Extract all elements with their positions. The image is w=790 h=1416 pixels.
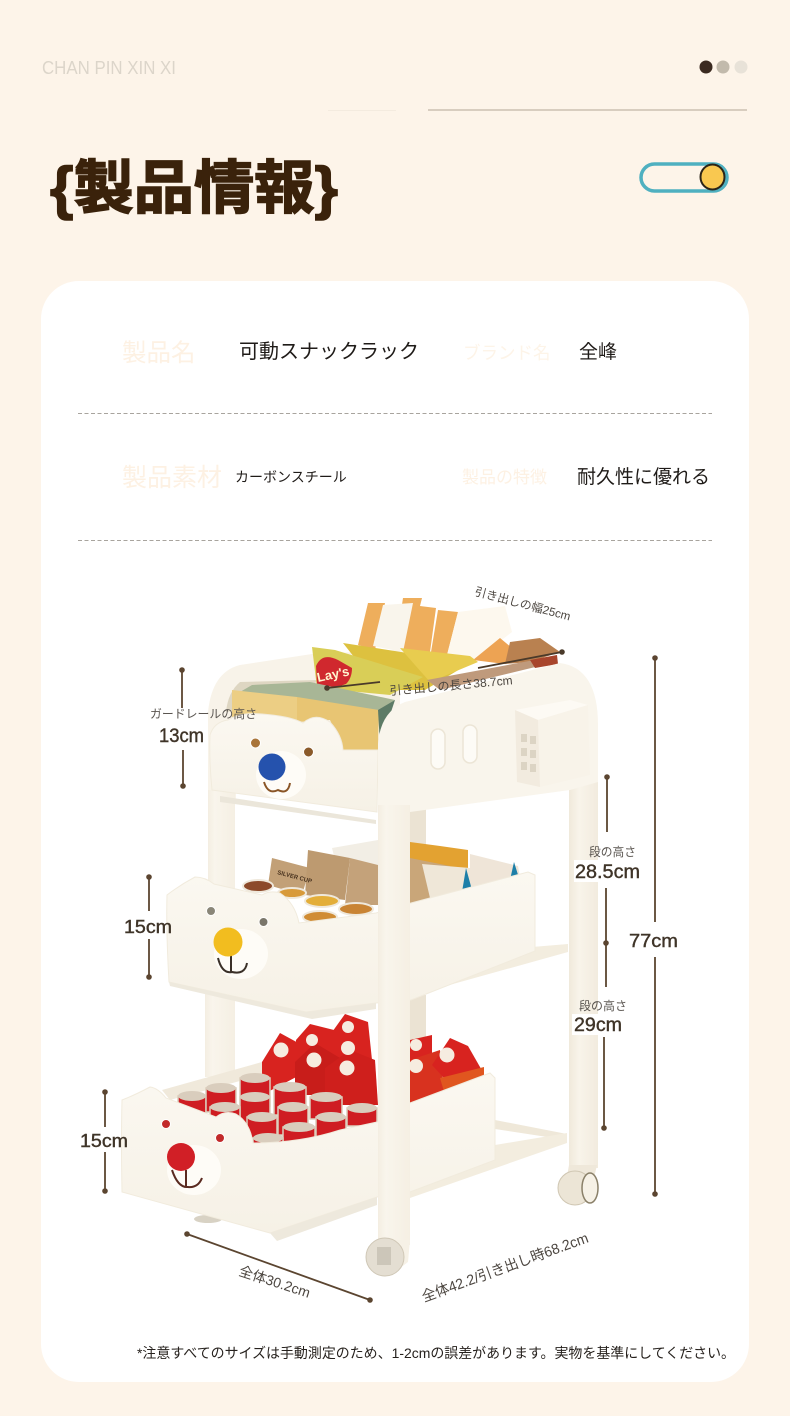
label: brand name: ブランド名	[463, 343, 550, 363]
title: {製品情報}	[50, 156, 338, 221]
rear frame	[205, 650, 426, 1077]
middle drawer with bear face	[167, 872, 535, 1019]
middle drawer contents	[243, 840, 520, 923]
dimension: upper tier height	[574, 774, 642, 987]
front left leg	[378, 805, 410, 1245]
bear mouth	[264, 782, 290, 791]
bear eyes	[206, 906, 268, 926]
top drawer contents: Lay's	[316, 663, 351, 685]
dimension: depth: 全体30.2cm	[237, 1263, 312, 1301]
bear mouth	[218, 952, 247, 973]
paper cups	[243, 880, 373, 923]
dimension: depth	[184, 1231, 373, 1303]
front top panel with pencil holder	[378, 663, 598, 814]
dimension: drawer width: 引き出しの幅25cm	[473, 584, 572, 623]
dimension: upper tier height: 28.5cm	[575, 862, 640, 883]
icon: rear caster wheel	[558, 1165, 598, 1205]
value: material: カーボンスチール	[235, 469, 347, 485]
icon: toggle switch	[641, 164, 727, 191]
dimension: drawer width: 引き出しの長さ38.7cm	[389, 673, 513, 698]
dimension: middle drawer height	[124, 874, 172, 980]
dimension: bottom drawer height: 15cm	[80, 1131, 128, 1151]
dimension: overall width: 全体42.2/引き出し時68.2cm	[420, 1230, 591, 1306]
header rule	[328, 109, 747, 111]
milk cartons	[262, 1014, 484, 1105]
bear muzzle	[256, 751, 306, 799]
pencil holder	[515, 700, 590, 787]
value: features: 耐久性に優れる	[577, 466, 710, 488]
drawer knob: yellow	[214, 928, 242, 956]
soda cans	[178, 1078, 377, 1147]
rack illustration	[122, 598, 598, 1276]
hooks	[431, 725, 477, 769]
back rim	[162, 1062, 262, 1100]
top drawer with bear face	[210, 714, 378, 824]
dimension: total height: 77cm	[629, 931, 678, 951]
dimension: middle drawer height: 15cm	[124, 917, 172, 937]
panel: product info table	[78, 339, 712, 540]
header label: CHAN PIN XIN XI	[42, 58, 176, 78]
bag lettering: SILVER CUP	[276, 870, 312, 885]
bottom drawer with bear face	[122, 1073, 495, 1241]
label: material: 製品素材	[122, 464, 222, 492]
value: product name: 可動スナックラック	[239, 340, 419, 363]
panel: product card	[41, 281, 749, 1382]
footnote: *注意すべてのサイズは手動測定のため、1-2cmの誤差があります。実物を基準にしてください。	[137, 1345, 735, 1361]
label: features: 製品の特徴	[462, 468, 547, 487]
bear eyes	[162, 1120, 224, 1142]
icon: three dots	[700, 60, 748, 74]
dimension: guardrail height: ガードレールの高さ	[150, 707, 257, 721]
top drawer contents	[232, 598, 560, 750]
bear muzzle	[214, 929, 268, 979]
dimension: lower tier height: 段の高さ	[579, 998, 627, 1013]
icon: front caster wheel	[366, 1238, 410, 1276]
bear mouth	[172, 1170, 202, 1187]
bottom drawer contents: cartons and cans	[162, 1014, 484, 1147]
value: brand name: 全峰	[579, 341, 617, 363]
dimension: upper tier height: 段の高さ	[589, 844, 636, 859]
dimension: lower tier height	[572, 998, 627, 1131]
dimension: bottom drawer height	[80, 1089, 128, 1194]
carton circles	[274, 1021, 454, 1076]
drawer knob: red	[167, 1143, 195, 1171]
dimension: drawer width	[324, 584, 572, 698]
dimension: total height	[629, 655, 678, 1197]
rear right leg and cross bars	[410, 780, 598, 1198]
divider one	[78, 412, 712, 414]
dimension: guardrail height: 13cm	[159, 726, 204, 747]
drawer knob: blue	[258, 754, 286, 780]
bear muzzle	[167, 1145, 221, 1195]
bear eyes	[250, 738, 314, 757]
dimension: guardrail height	[150, 667, 257, 789]
can tops	[178, 1073, 377, 1143]
label: product name: 製品名	[122, 339, 196, 367]
divider two	[78, 540, 712, 542]
dimension: lower tier height: 29cm	[574, 1015, 622, 1036]
